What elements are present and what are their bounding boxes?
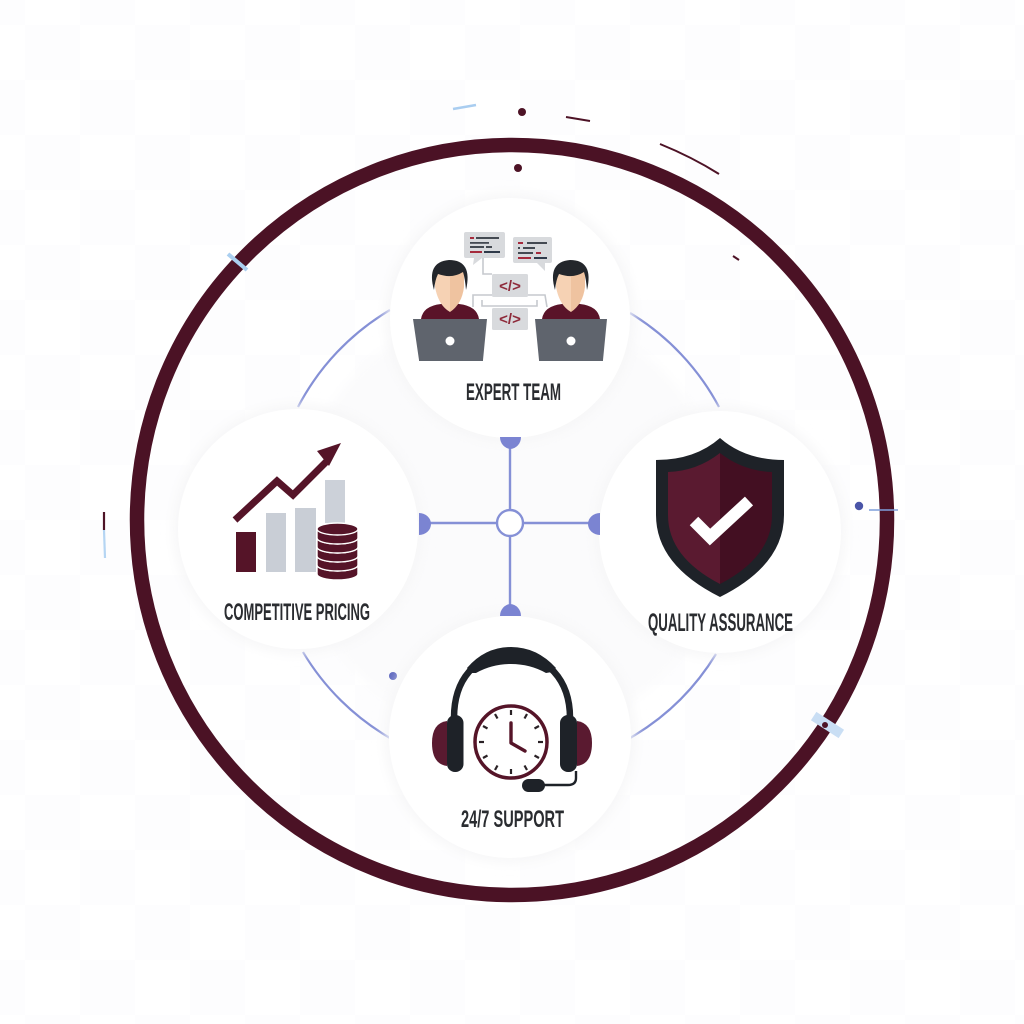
panel: quality assurance bbox=[595, 407, 845, 657]
icon: code box lower: </> bbox=[499, 311, 521, 328]
label: 24/7 support: 24/7 SUPPORT bbox=[461, 806, 564, 833]
icon: code connector lines bbox=[473, 258, 547, 307]
outer ring bbox=[137, 145, 887, 895]
icon: person with laptop right bbox=[535, 260, 607, 361]
icon: speech bubbles bbox=[464, 232, 552, 271]
central hub connector bbox=[419, 437, 600, 616]
panel: expert team bbox=[386, 194, 634, 442]
icon: coin stack bbox=[317, 523, 358, 580]
panel: 24/7 support bbox=[385, 612, 635, 862]
icon: code box upper bbox=[492, 274, 528, 297]
panel: competitive pricing bbox=[174, 405, 422, 653]
label: expert team: EXPERT TEAM bbox=[466, 379, 561, 406]
icon: code box upper: </> bbox=[499, 278, 521, 295]
icon: code box lower bbox=[492, 308, 528, 330]
icon: trend arrow bbox=[235, 443, 341, 520]
decorative accents around the ring bbox=[104, 105, 898, 738]
icon: bars bbox=[236, 480, 345, 572]
label: quality assurance: QUALITY ASSURANCE bbox=[648, 609, 793, 637]
icon: clock bbox=[475, 706, 547, 778]
label: competitive pricing: COMPETITIVE PRICING bbox=[224, 599, 370, 626]
icon: person with laptop left bbox=[413, 260, 487, 361]
connector arcs bbox=[298, 310, 719, 738]
icon: headset bbox=[432, 647, 592, 792]
icon: shield with check bbox=[656, 438, 784, 597]
